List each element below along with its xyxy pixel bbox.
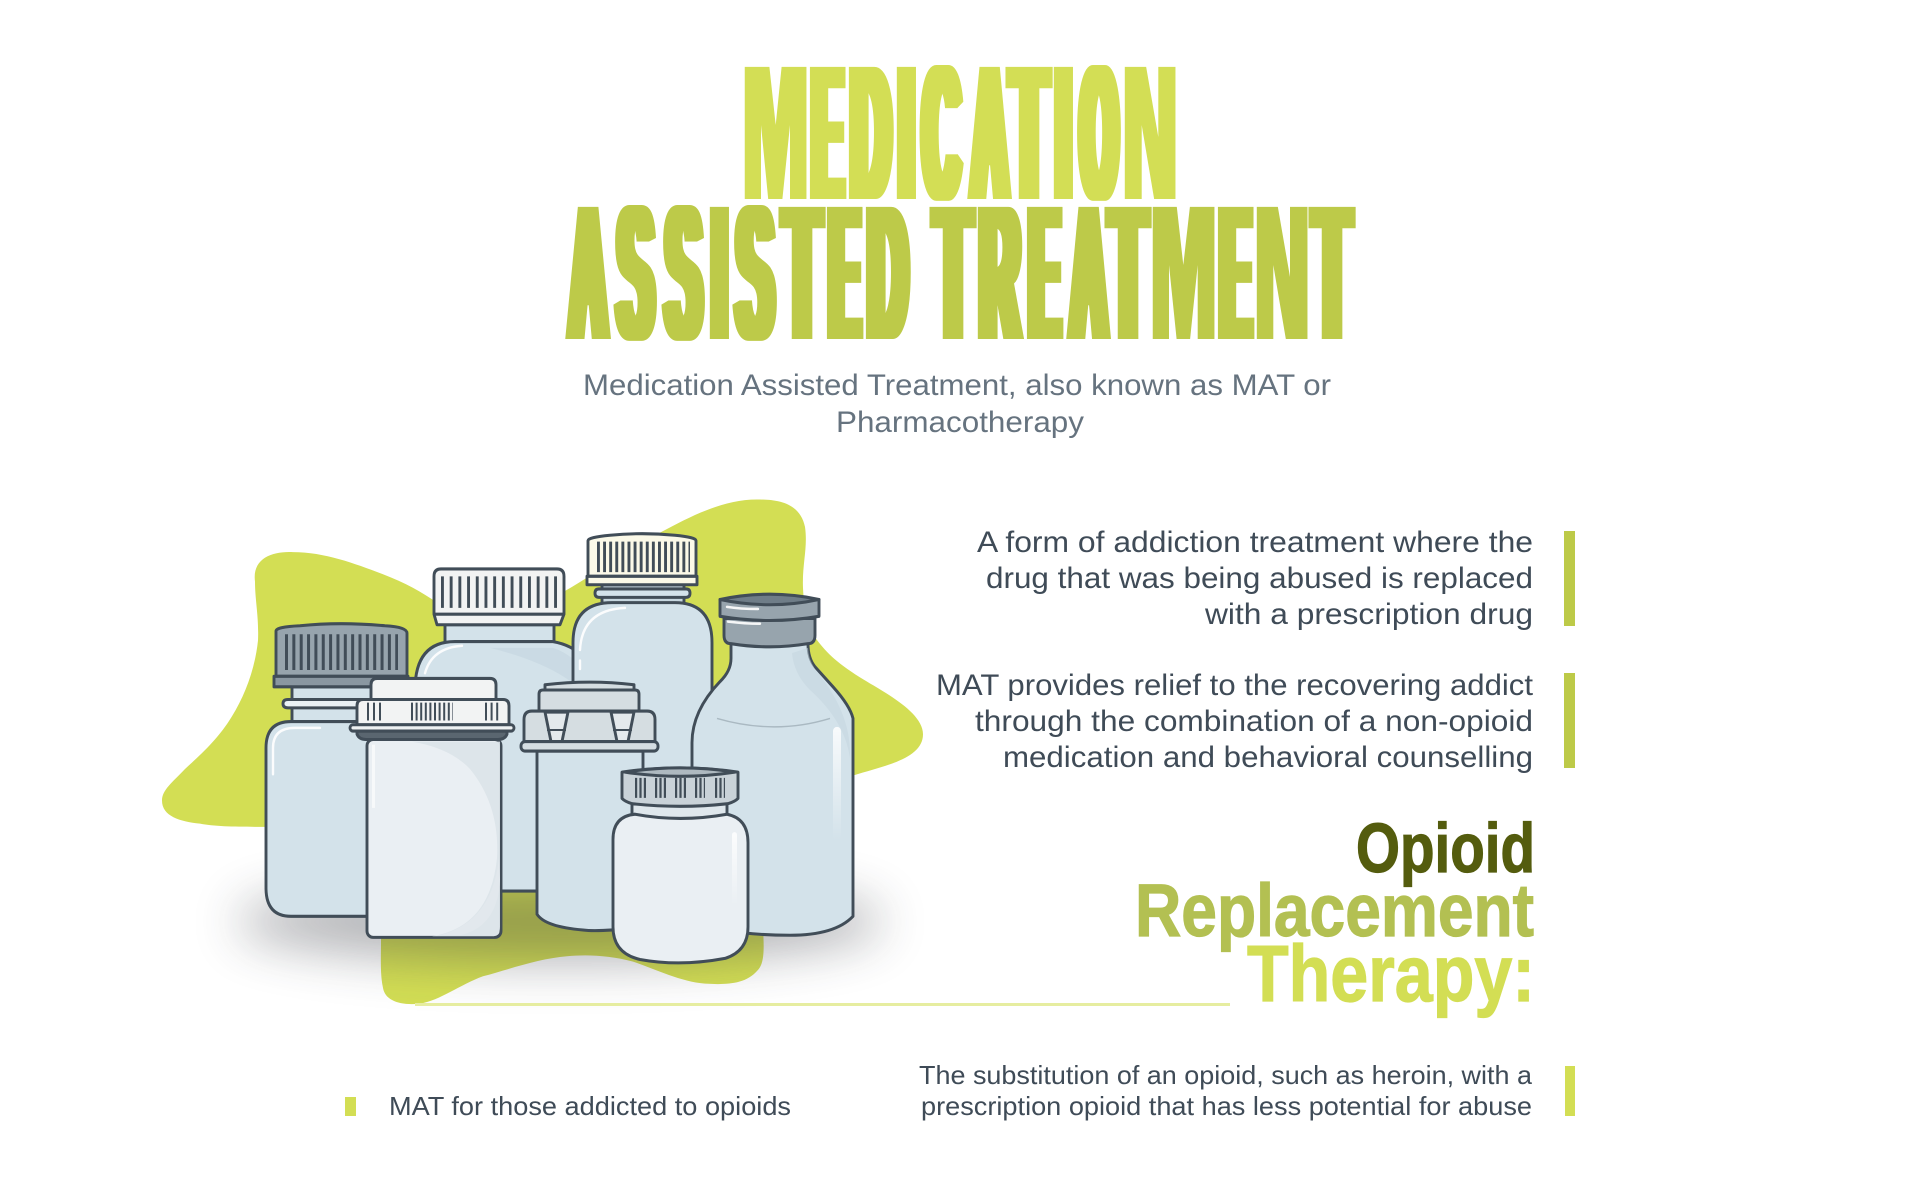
bottle: back, white cap xyxy=(415,569,600,891)
bottle: right vial, grey stopper xyxy=(692,594,853,935)
title line 2: M xyxy=(1154,165,1213,380)
heading: Opioid Replacement Therapy xyxy=(1135,809,1535,1018)
title line 2: T xyxy=(935,165,971,380)
title line 2: E xyxy=(1221,165,1250,380)
title line 1: C xyxy=(924,25,959,240)
title line 2: T xyxy=(784,165,820,380)
text block: substitution definition: prescription opioid that has less potential for abuse xyxy=(921,1091,1532,1121)
text: T xyxy=(1314,165,1350,380)
heading: Opioid Replacement Therapy: Opioid xyxy=(1356,809,1535,887)
heading: Opioid Replacement Therapy: Replacement xyxy=(1135,869,1534,952)
subtitle xyxy=(583,369,1331,439)
title line 1: D xyxy=(851,25,890,240)
bullet marker xyxy=(345,1097,356,1116)
divider line under illustration xyxy=(415,1003,1230,1006)
bottle: front rectangular, white label cap xyxy=(350,678,514,937)
title line 2: I xyxy=(712,165,726,380)
bullet text: MAT for those addicted to opioids xyxy=(389,1091,791,1121)
text block: definition 1: with a prescription drug xyxy=(1204,598,1533,631)
title: N xyxy=(1126,25,1174,240)
bottle: centre, flip-top cap xyxy=(521,682,658,931)
title line 2: E xyxy=(830,165,859,380)
title line 2: D xyxy=(868,165,907,380)
title line 2: N xyxy=(1258,165,1306,380)
title line 2: S xyxy=(737,165,773,380)
title line 2: T xyxy=(1110,165,1146,380)
text block: substitution definition xyxy=(919,1060,1533,1121)
text block: definition 2: MAT provides relief to the recovering addict xyxy=(936,669,1534,702)
title line 1: T xyxy=(1011,25,1047,240)
text block: definition 1 xyxy=(977,526,1533,631)
text block: definition 2: through the combination of a non-opioid xyxy=(975,705,1533,738)
accent bar 3 xyxy=(1565,1066,1575,1116)
subtitle: Medication Assisted Treatment, also known as MAT or xyxy=(583,369,1331,402)
illustration: medicine bottles on green blob xyxy=(162,499,923,1004)
accent bar 2 xyxy=(1564,673,1575,768)
heading: Opioid Replacement Therapy: Therapy: xyxy=(1247,929,1535,1018)
title line 1: I xyxy=(1056,25,1070,240)
subtitle: Pharmacotherapy xyxy=(836,406,1084,439)
title line 2: E xyxy=(1030,165,1059,380)
title line 2: R xyxy=(980,165,1019,380)
title line 2: A xyxy=(1071,165,1106,380)
green blob background xyxy=(162,499,923,1004)
title line 1: M xyxy=(746,25,805,240)
title line 1: A xyxy=(972,25,1007,240)
title line 1: I xyxy=(900,25,913,240)
title line 2: S xyxy=(618,165,653,380)
title line 2: A xyxy=(570,165,606,380)
bottle: left, grey cap xyxy=(266,624,408,916)
text block: definition 1: A form of addiction treatment where the xyxy=(977,526,1533,559)
text block: definition 1: drug that was being abused is replaced xyxy=(986,562,1533,595)
text block: definition 2: medication and behavioral counselling xyxy=(1003,741,1533,774)
title xyxy=(570,25,1350,380)
bottle: tall centre, cream cap xyxy=(573,534,712,816)
title line 1: O xyxy=(1081,25,1117,240)
title line 2: S xyxy=(666,165,701,380)
text block: definition 2 xyxy=(936,669,1534,774)
title line 1: E xyxy=(813,25,842,240)
bottle: small front xyxy=(613,768,748,963)
accent bar 1 xyxy=(1564,531,1575,626)
ground shadow xyxy=(235,882,885,962)
text block: substitution definition: The substitution of an opioid, such as heroin, with a xyxy=(919,1060,1533,1090)
